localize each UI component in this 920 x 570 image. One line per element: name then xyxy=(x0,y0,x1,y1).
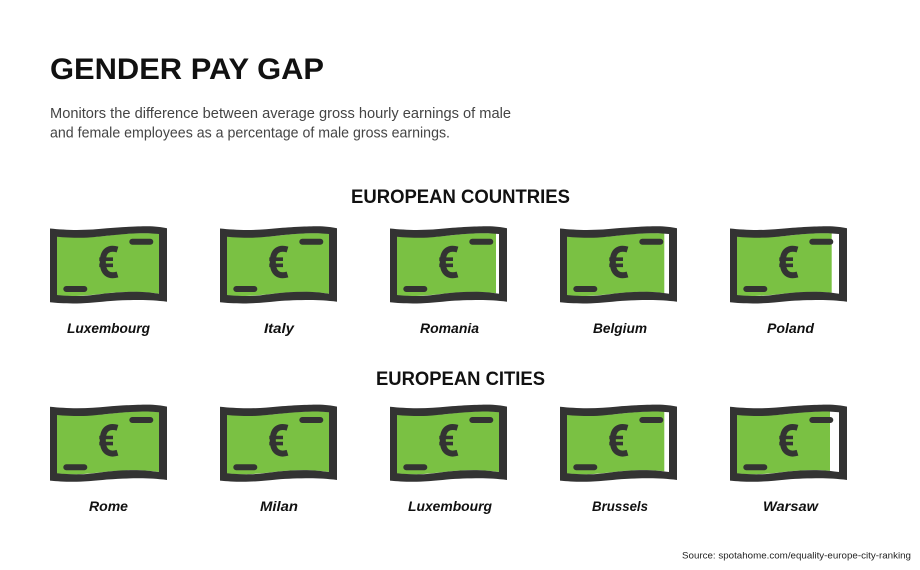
icon: Poland banknote xyxy=(730,226,847,304)
icon: Italy banknote xyxy=(220,226,337,304)
source note: Source: spotahome.com/equality-europe-city-ranking xyxy=(682,550,911,562)
icon: Rome banknote xyxy=(50,405,167,482)
label: Luxembourg: Luxembourg xyxy=(67,320,150,336)
icon: Milan banknote xyxy=(220,405,337,482)
description text: Monitors the difference between average gross hourly earnings of male xyxy=(50,105,511,122)
label: Warsaw: Warsaw xyxy=(763,498,819,514)
description text xyxy=(50,105,511,142)
icon: Belgium banknote xyxy=(560,226,677,304)
icon: Warsaw banknote xyxy=(730,405,847,482)
icon: Romania banknote xyxy=(390,226,507,304)
icon: Luxembourg banknote xyxy=(50,226,167,304)
label: Belgium: Belgium xyxy=(593,320,647,336)
title: GENDER PAY GAP xyxy=(50,53,324,86)
label: Poland: Poland xyxy=(767,320,814,336)
label: Luxembourg city: Luxembourg xyxy=(408,498,492,514)
panel: countries row xyxy=(50,226,847,336)
label: Romania: Romania xyxy=(420,320,479,336)
panel: cities row xyxy=(50,405,847,514)
icon: Luxembourg city banknote xyxy=(390,405,507,482)
description text: and female employees as a percentage of male gross earnings. xyxy=(50,124,450,142)
label: Brussels: Brussels xyxy=(592,498,648,514)
heading: European cities: EUROPEAN CITIES xyxy=(376,369,545,390)
icon: Brussels banknote xyxy=(560,405,677,482)
label: Italy: Italy xyxy=(264,320,295,336)
heading: European countries: EUROPEAN COUNTRIES xyxy=(351,187,570,208)
label: Milan: Milan xyxy=(260,498,298,514)
label: Rome: Rome xyxy=(89,498,128,514)
